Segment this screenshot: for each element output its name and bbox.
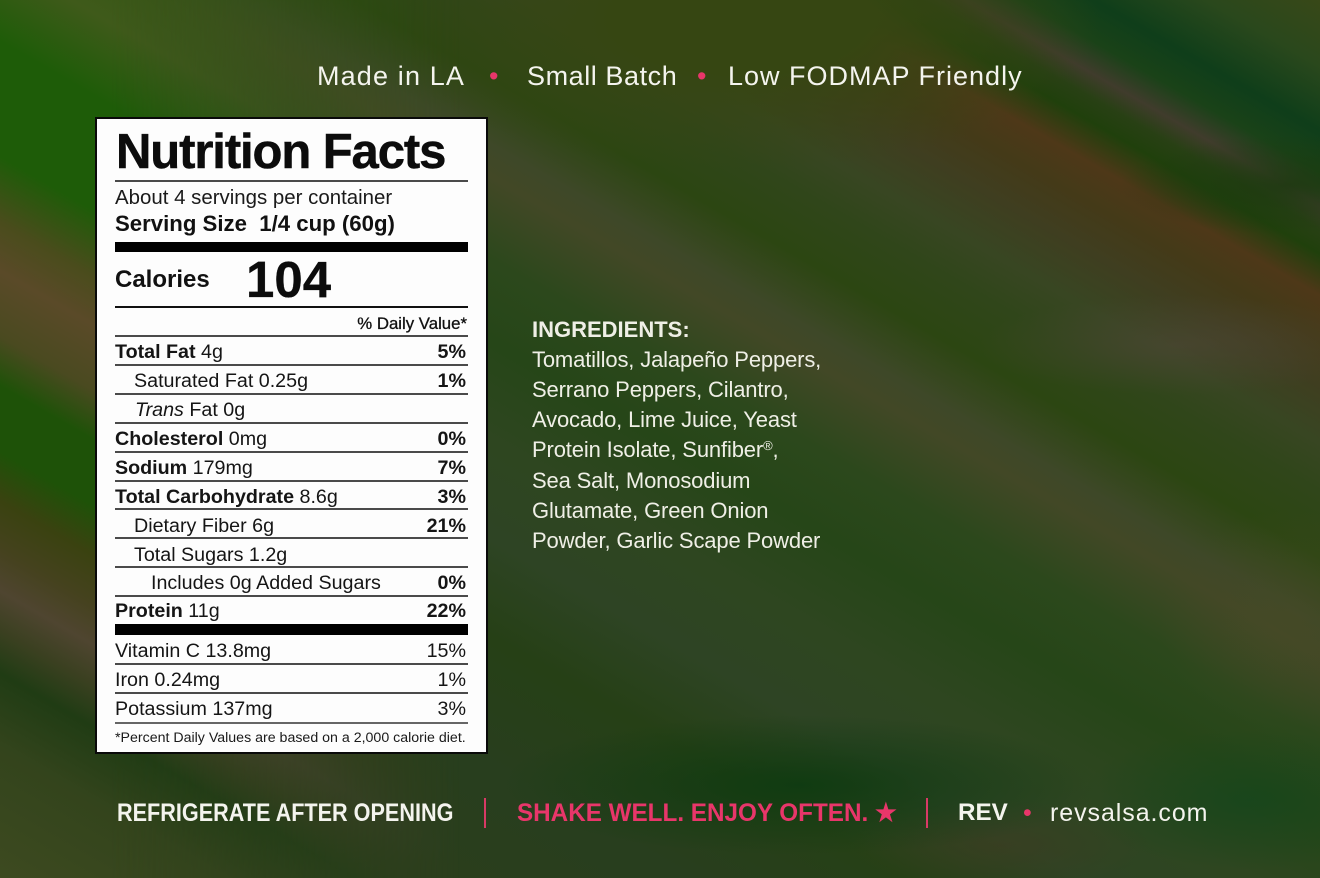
bullet: • xyxy=(1023,799,1032,827)
row: vitamin c: Vitamin C 13.8mg xyxy=(115,640,271,662)
row: added sugars: Includes 0g Added Sugars xyxy=(151,572,381,594)
row: sodium: 7% xyxy=(438,457,466,479)
servings per container: About 4 servings per container xyxy=(115,186,392,209)
ingredients text block: Serrano Peppers, Cilantro, xyxy=(532,377,789,402)
ingredients text block: Avocado, Lime Juice, Yeast xyxy=(532,407,797,432)
panel: nutrition facts label xyxy=(95,117,488,754)
daily value header: % Daily Value* xyxy=(357,314,467,333)
row: protein: 22% xyxy=(427,600,466,622)
ingredients text block: INGREDIENTS: xyxy=(532,316,690,342)
ingredients text block: Powder, Garlic Scape Powder xyxy=(532,528,820,553)
row: total carbohydrate xyxy=(115,486,466,508)
row: total fat xyxy=(115,341,466,363)
website: revsalsa.com xyxy=(1050,799,1208,827)
footnote: *Percent Daily Values are based on a 2,000 calorie diet. xyxy=(115,730,466,746)
ingredients text block: Glutamate, Green Onion xyxy=(532,498,768,523)
calories label: Calories xyxy=(115,266,210,293)
divider xyxy=(484,798,486,828)
row: iron xyxy=(115,669,466,691)
refrigerate notice: REFRIGERATE AFTER OPENING xyxy=(117,799,453,827)
row: dietary fiber xyxy=(134,515,466,537)
ingredients text block: Protein Isolate, Sunfiber®, xyxy=(532,437,778,462)
row: protein: Protein 11g xyxy=(115,600,220,622)
nutrient rows xyxy=(115,341,468,622)
serving size: Serving Size 1/4 cup (60g) xyxy=(115,211,395,236)
row: trans fat: Trans Fat 0g xyxy=(135,399,245,421)
row: cholesterol: 0% xyxy=(438,428,466,450)
top tagline: • xyxy=(489,61,498,91)
row: dietary fiber: 21% xyxy=(427,515,466,537)
footer strip xyxy=(117,798,1208,828)
row: total fat: Total Fat 4g xyxy=(115,341,223,363)
heading: Nutrition Facts: Nutrition Facts xyxy=(116,125,445,179)
row: sodium xyxy=(115,457,466,479)
ingredients text block: Tomatillos, Jalapeño Peppers, xyxy=(532,347,821,372)
row: potassium: Potassium 137mg xyxy=(115,698,273,720)
row: iron: 1% xyxy=(438,669,466,691)
row: iron: Iron 0.24mg xyxy=(115,669,220,691)
row: sodium: Sodium 179mg xyxy=(115,457,253,479)
row: saturated fat: Saturated Fat 0.25g xyxy=(134,370,308,392)
row: protein xyxy=(115,600,466,622)
row: dietary fiber: Dietary Fiber 6g xyxy=(134,515,274,537)
shake well slogan: SHAKE WELL. ENJOY OFTEN. ★ xyxy=(517,799,897,827)
row: total carbohydrate: 3% xyxy=(438,486,466,508)
row: saturated fat: 1% xyxy=(438,370,466,392)
ingredients text block xyxy=(532,316,821,553)
calories value: 104 xyxy=(246,251,331,308)
top tagline: Made in LA xyxy=(317,61,465,91)
row: potassium xyxy=(115,698,466,720)
row: vitamin c: 15% xyxy=(427,640,466,662)
row: potassium: 3% xyxy=(438,698,466,720)
row: total sugars: Total Sugars 1.2g xyxy=(134,544,287,566)
top tagline: Low FODMAP Friendly xyxy=(728,61,1023,91)
ingredients text block: Sea Salt, Monosodium xyxy=(532,468,750,493)
row: total carbohydrate: Total Carbohydrate 8.6g xyxy=(115,486,338,508)
row: cholesterol: Cholesterol 0mg xyxy=(115,428,267,450)
top tagline xyxy=(317,61,1023,91)
row: cholesterol xyxy=(115,428,466,450)
top tagline: • xyxy=(697,61,706,91)
brand: REV xyxy=(958,799,1008,826)
row: vitamin c xyxy=(115,640,466,662)
divider xyxy=(926,798,928,828)
row: added sugars: 0% xyxy=(438,572,466,594)
row: total fat: 5% xyxy=(438,341,466,363)
top tagline: Small Batch xyxy=(527,61,677,91)
row: saturated fat xyxy=(134,370,466,392)
